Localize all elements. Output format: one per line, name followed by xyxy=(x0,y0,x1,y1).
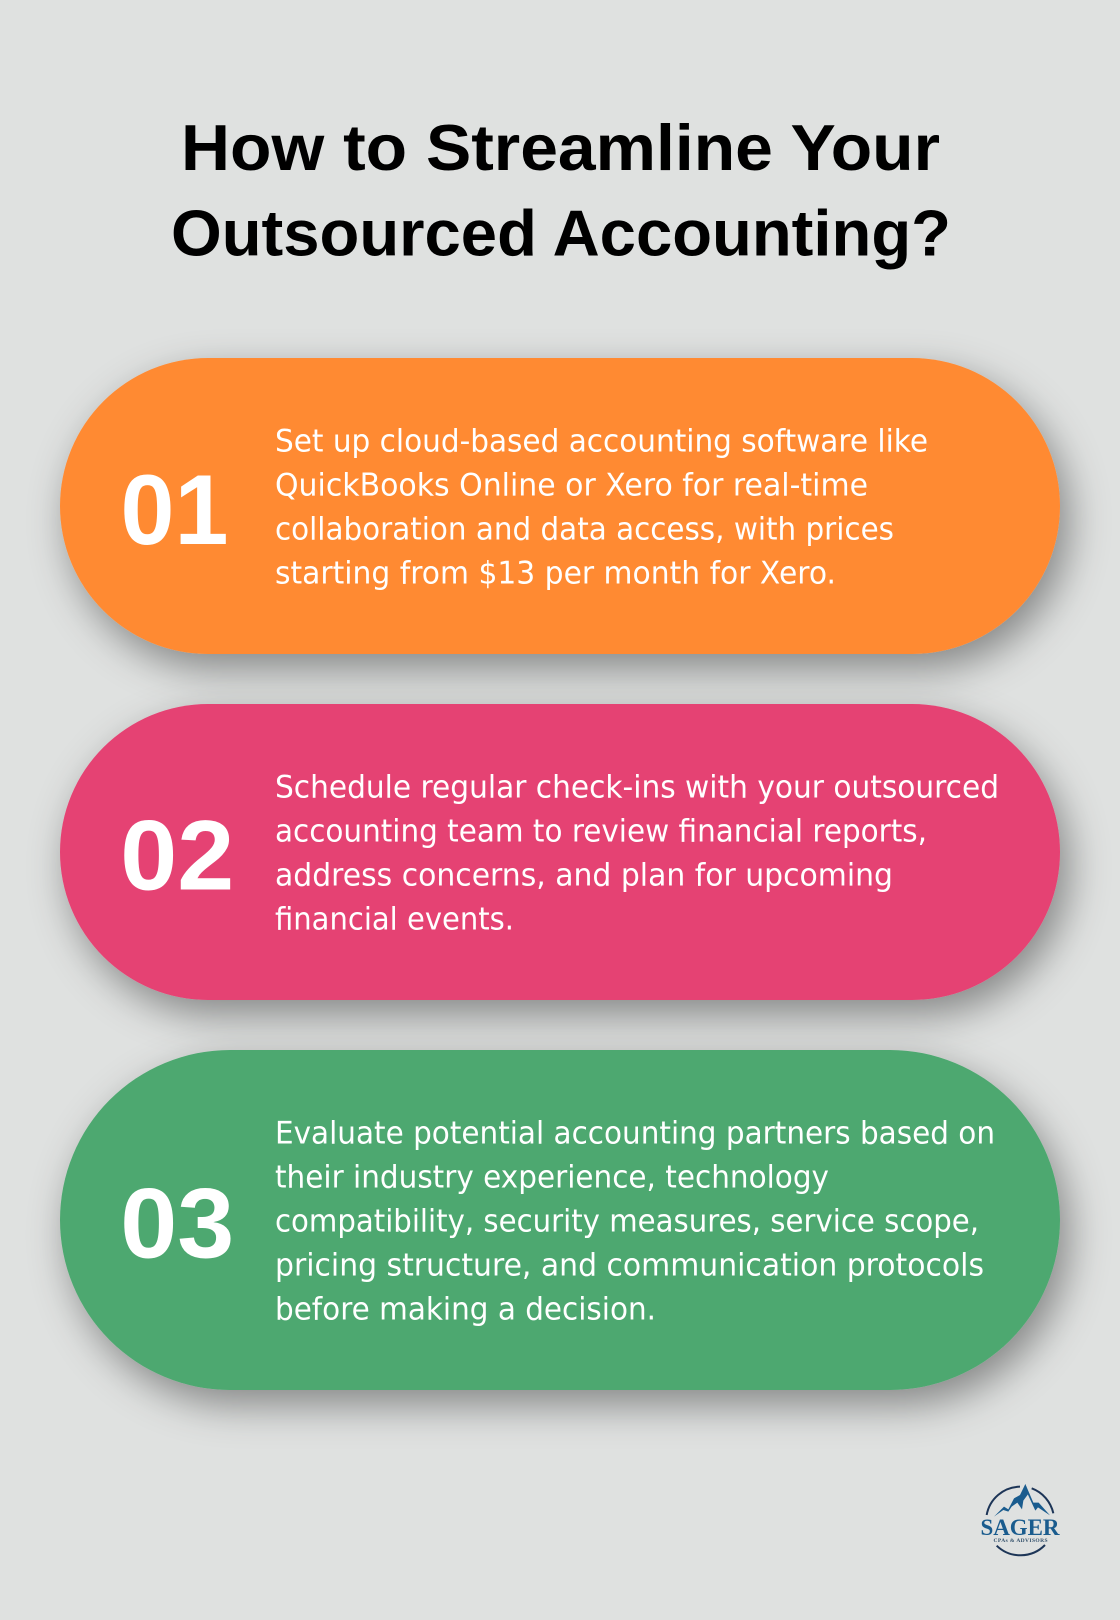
number 01: 01 xyxy=(120,454,228,565)
step 03 text: pricing structure, and communication protocols xyxy=(275,1248,984,1284)
logo wordmark: SAGER xyxy=(980,1515,1060,1540)
logo: Sager CPAs & Advisors xyxy=(980,1484,1060,1555)
panel: step 01 xyxy=(60,358,1060,654)
logo tagline: CPAs & ADVISORS xyxy=(994,1538,1048,1544)
step 01 text: starting from $13 per month for Xero. xyxy=(275,555,836,591)
title: Outsourced Accounting? xyxy=(171,197,951,270)
step 03 text: their industry experience, technology xyxy=(275,1159,829,1195)
step 02 text: financial events. xyxy=(275,901,514,937)
step 03 text: before making a decision. xyxy=(275,1292,656,1328)
green pill xyxy=(60,1050,1060,1390)
step 03 text: Evaluate potential accounting partners based on xyxy=(275,1116,995,1152)
panel: step 02 xyxy=(60,704,1060,1000)
step 01 text: collaboration and data access, with prices xyxy=(275,511,894,547)
title xyxy=(171,111,951,270)
orange pill xyxy=(60,358,1060,654)
step 03 text xyxy=(275,1116,995,1328)
step 02 text xyxy=(275,769,999,937)
step 01 text xyxy=(275,424,928,591)
title: How to Streamline Your xyxy=(181,111,940,184)
step 02 text: Schedule regular check-ins with your outsourced xyxy=(275,769,999,805)
step 01 text: Set up cloud-based accounting software like xyxy=(275,424,928,460)
step 03 text: compatibility, security measures, service scope, xyxy=(275,1203,979,1239)
pink pill xyxy=(60,704,1060,1000)
step 02 text: address concerns, and plan for upcoming xyxy=(275,858,893,894)
panel: step 03 xyxy=(60,1050,1060,1390)
number 02: 02 xyxy=(120,799,234,910)
step 01 text: QuickBooks Online or Xero for real-time xyxy=(275,468,868,504)
number 03: 03 xyxy=(120,1168,234,1279)
step 02 text: accounting team to review financial reports, xyxy=(275,814,927,850)
logo icon: mountain and ring xyxy=(987,1484,1053,1555)
